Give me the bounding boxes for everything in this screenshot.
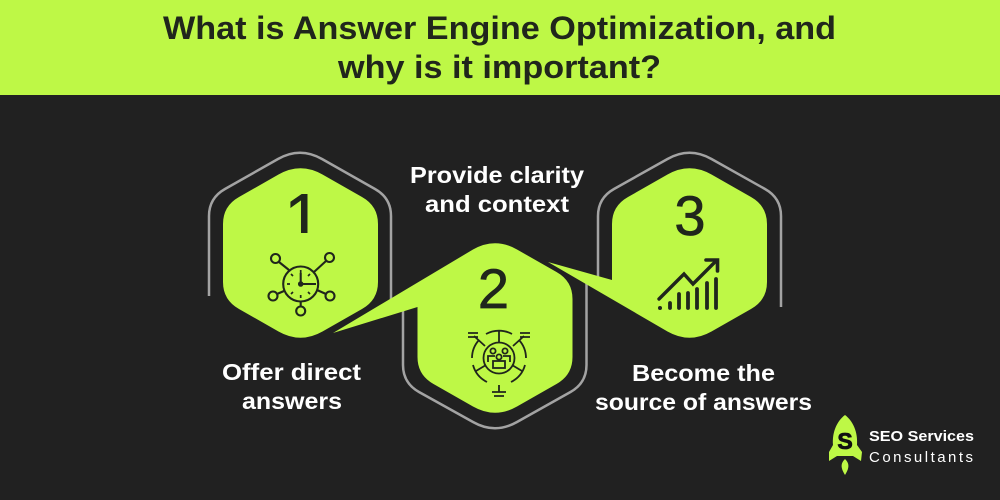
icon: rocket bbox=[829, 415, 862, 475]
label: become the source of answers: source of answers bbox=[595, 389, 812, 415]
hexagon outline 1 bbox=[209, 153, 391, 302]
label: offer direct answers: Offer direct bbox=[222, 359, 361, 385]
number 3: 3 bbox=[674, 184, 706, 247]
icon: growth chart bbox=[658, 260, 718, 310]
logo bbox=[829, 415, 978, 475]
number 2: 2 bbox=[478, 257, 509, 320]
title: why is it important? bbox=[337, 49, 661, 85]
icon: rocket: S bbox=[837, 428, 853, 454]
label: provide clarity and context: and context bbox=[425, 191, 569, 217]
step 3 hexagon with pointer bbox=[548, 168, 767, 338]
logo wordmark: Consultants bbox=[869, 449, 973, 466]
hexagon outline 2 bbox=[403, 280, 586, 428]
label: become the source of answers: Become the bbox=[632, 360, 775, 386]
number 1: 1 bbox=[284, 180, 322, 256]
title: What is Answer Engine Optimization, and bbox=[163, 10, 836, 46]
logo wordmark: SEO Services bbox=[869, 428, 974, 445]
label: offer direct answers: answers bbox=[242, 388, 342, 414]
step 2 hexagon with pointer bbox=[333, 243, 572, 413]
icon: target audience bbox=[468, 331, 530, 396]
label: provide clarity and context: Provide clarity bbox=[410, 162, 584, 188]
header band with title bbox=[0, 0, 1000, 95]
step 1 hexagon bbox=[223, 168, 378, 338]
hexagon outline 3 bbox=[598, 153, 781, 307]
icon: clock network bbox=[268, 253, 334, 316]
